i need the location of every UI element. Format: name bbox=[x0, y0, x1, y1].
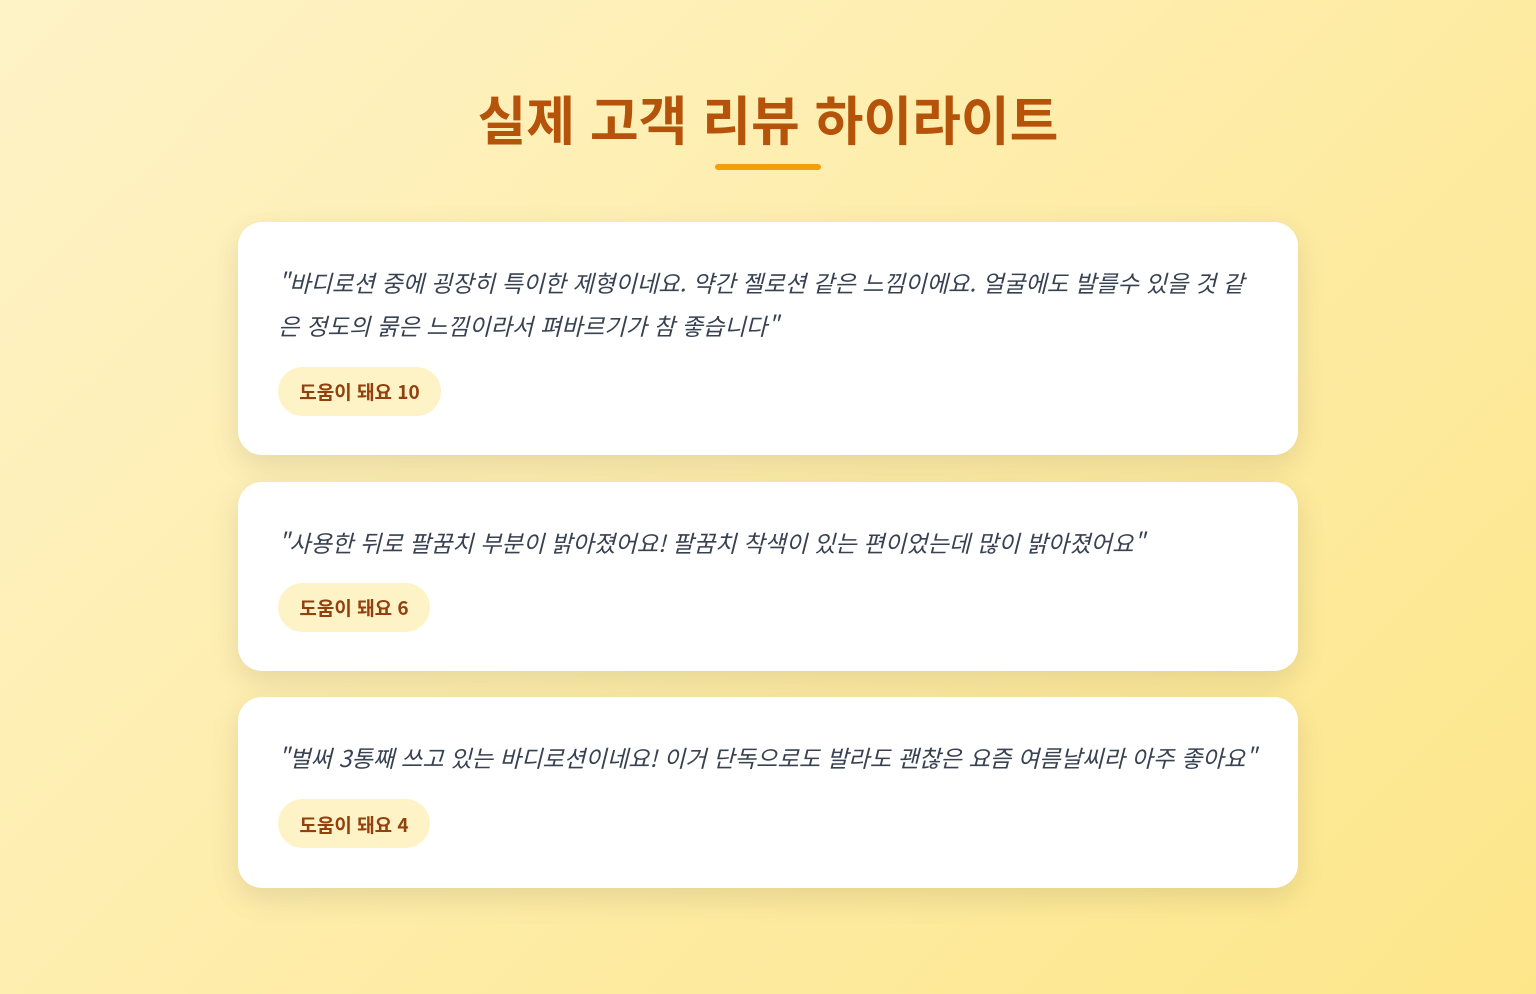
review text 1: 은 정도의 묽은 느낌이라서 펴바르기가 참 좋습니다" bbox=[278, 308, 778, 342]
helpful badge 3 bbox=[278, 799, 430, 848]
helpful badge 2 bbox=[278, 583, 430, 632]
title underline bbox=[715, 164, 821, 170]
review text 3: "벌써 3통째 쓰고 있는 바디로션이네요! 이거 단독으로도 발라도 괜찮은 요즘 여름날씨라 아주 좋아요" bbox=[278, 740, 1256, 774]
title: 실제 고객 리뷰 하이라이트 bbox=[478, 80, 1058, 156]
panel: review card 3 bbox=[238, 697, 1298, 888]
panel: review card 1 bbox=[238, 222, 1298, 455]
panel: review card 2 bbox=[238, 482, 1298, 671]
helpful badge 1 bbox=[278, 367, 441, 416]
helpful badge 2: 도움이 돼요 6 bbox=[299, 594, 409, 621]
review text 2: "사용한 뒤로 팔꿈치 부분이 밝아졌어요! 팔꿈치 착색이 있는 편이었는데 많이 밝아졌어요" bbox=[278, 525, 1144, 559]
review text 1: "바디로션 중에 굉장히 특이한 제형이네요. 약간 젤로션 같은 느낌이에요. 얼굴에도 발를수 있을 것 같 bbox=[278, 265, 1244, 299]
helpful badge 1: 도움이 돼요 10 bbox=[299, 378, 420, 405]
review text 1 bbox=[278, 265, 1247, 342]
helpful badge 3: 도움이 돼요 4 bbox=[299, 811, 409, 838]
